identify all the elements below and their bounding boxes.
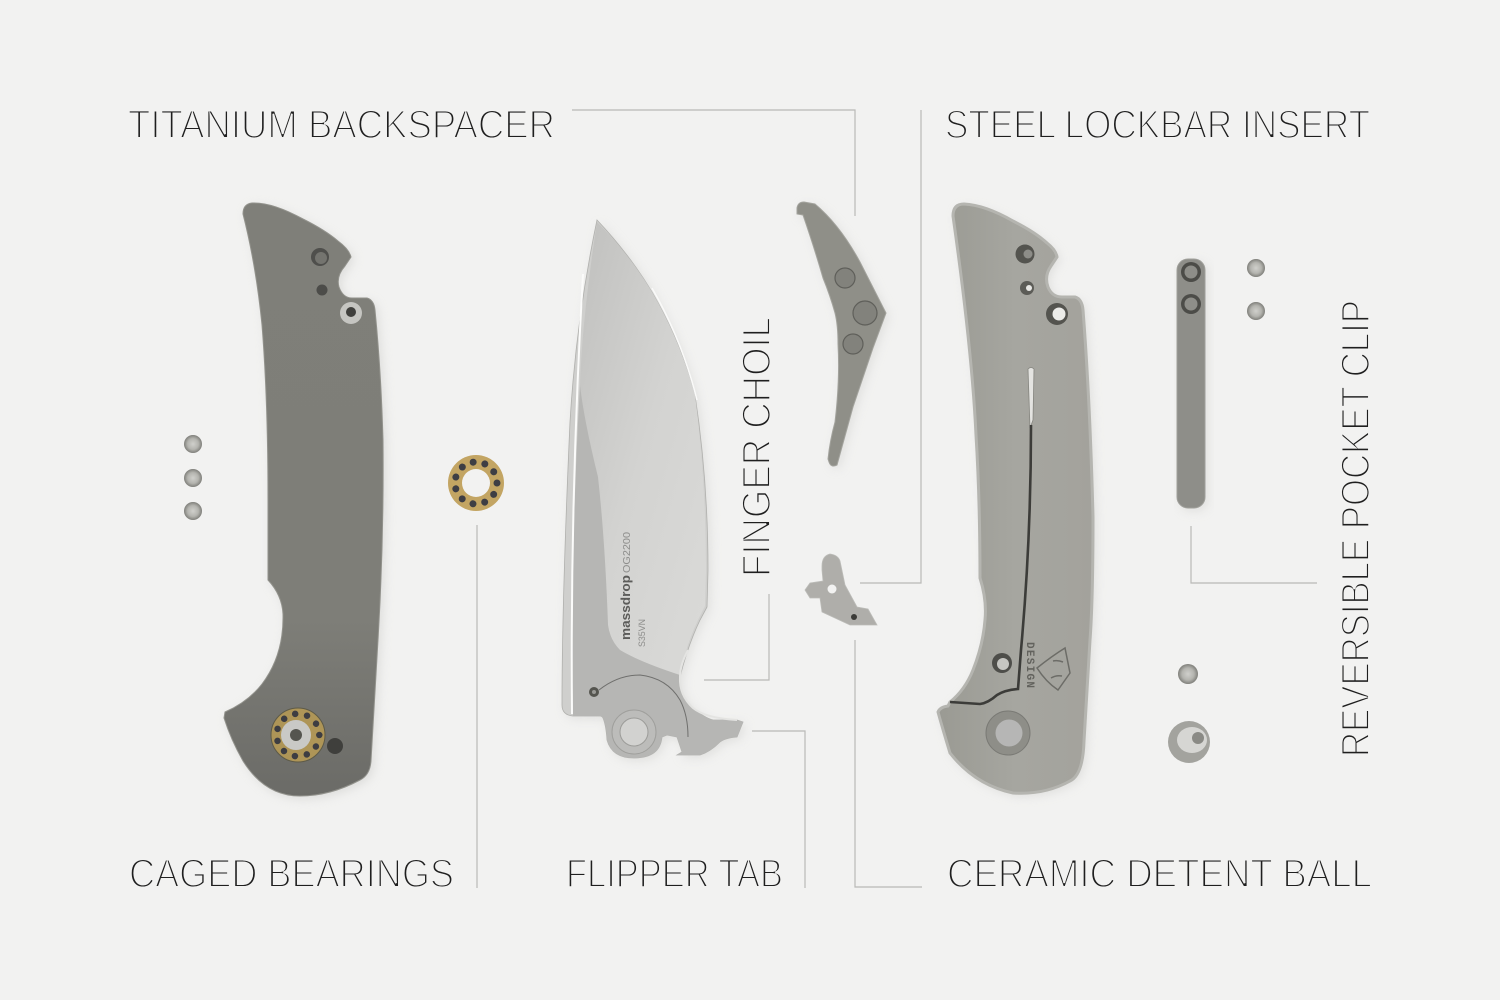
backspacer holes bbox=[835, 268, 877, 354]
blade body bbox=[562, 220, 743, 758]
lockbar cut bbox=[950, 425, 1031, 704]
loose caged bearing bbox=[448, 455, 504, 511]
caged bearing on handle bbox=[271, 708, 325, 762]
pivot recess bbox=[986, 711, 1030, 755]
leader: caged bearings bbox=[476, 525, 478, 888]
shield logo bbox=[1037, 648, 1070, 690]
pivot screw: large bbox=[1168, 721, 1210, 763]
leader: flipper tab bbox=[752, 731, 805, 888]
screw: small bbox=[1178, 664, 1198, 684]
pocket clip bbox=[1177, 259, 1208, 511]
label: steel lockbar insert: STEEL LOCKBAR INSERT bbox=[945, 103, 1370, 147]
lockbar slot light section bbox=[1028, 368, 1034, 428]
blade marking: steel: S35VN bbox=[637, 619, 647, 647]
label: finger choil: FINGER CHOIL bbox=[735, 317, 779, 577]
hole: small bbox=[316, 284, 328, 296]
blade marking: massdrop: massdrop bbox=[619, 575, 633, 640]
label: caged bearings: CAGED BEARINGS bbox=[129, 852, 454, 896]
hole: upper bbox=[311, 248, 329, 266]
blade marking: serial: OG2200 bbox=[622, 532, 633, 573]
leader: reversible pocket clip bbox=[1191, 526, 1317, 583]
label: flipper tab: FLIPPER TAB bbox=[566, 852, 783, 896]
hole: standoff bbox=[1046, 303, 1068, 325]
leader: steel lockbar insert bbox=[860, 110, 921, 583]
hollow grind facet bbox=[580, 222, 706, 675]
lock lever with ceramic detent ball bbox=[805, 554, 877, 625]
logo text: DESIGN bbox=[1023, 642, 1035, 688]
choil highlight bbox=[680, 650, 737, 720]
detent track arc bbox=[599, 675, 688, 737]
hole: small bbox=[1020, 281, 1034, 295]
hole: upper bbox=[1016, 244, 1034, 264]
edge highlight bbox=[572, 274, 583, 714]
right steel handle bbox=[938, 204, 1096, 796]
leader: titanium backspacer bbox=[572, 110, 855, 216]
screws: left group bbox=[184, 435, 202, 520]
left titanium handle bbox=[224, 203, 386, 799]
pivot standoff bbox=[340, 302, 362, 324]
label: titanium backspacer: TITANIUM BACKSPACER bbox=[128, 103, 555, 147]
clip hole: bottom bbox=[1181, 294, 1201, 314]
flat grind shading bbox=[572, 385, 743, 758]
blade bbox=[562, 220, 746, 761]
leader: ceramic detent ball bbox=[855, 640, 922, 887]
label: reversible pocket clip: REVERSIBLE POCKET CLIP bbox=[1334, 300, 1378, 757]
label: ceramic detent ball: CERAMIC DETENT BALL bbox=[947, 852, 1372, 896]
lock stop pin bbox=[992, 653, 1012, 673]
detent ball bbox=[851, 614, 857, 620]
detent dimple bbox=[589, 687, 599, 697]
clip hole: top bbox=[1181, 262, 1201, 282]
lever hole bbox=[828, 584, 836, 594]
pivot hole bbox=[612, 710, 656, 754]
leader: finger choil bbox=[704, 594, 769, 680]
backspacer bbox=[797, 202, 889, 469]
hole: lower bbox=[327, 738, 343, 754]
screws: clip pair bbox=[1247, 259, 1265, 320]
spine highlight bbox=[652, 288, 697, 400]
